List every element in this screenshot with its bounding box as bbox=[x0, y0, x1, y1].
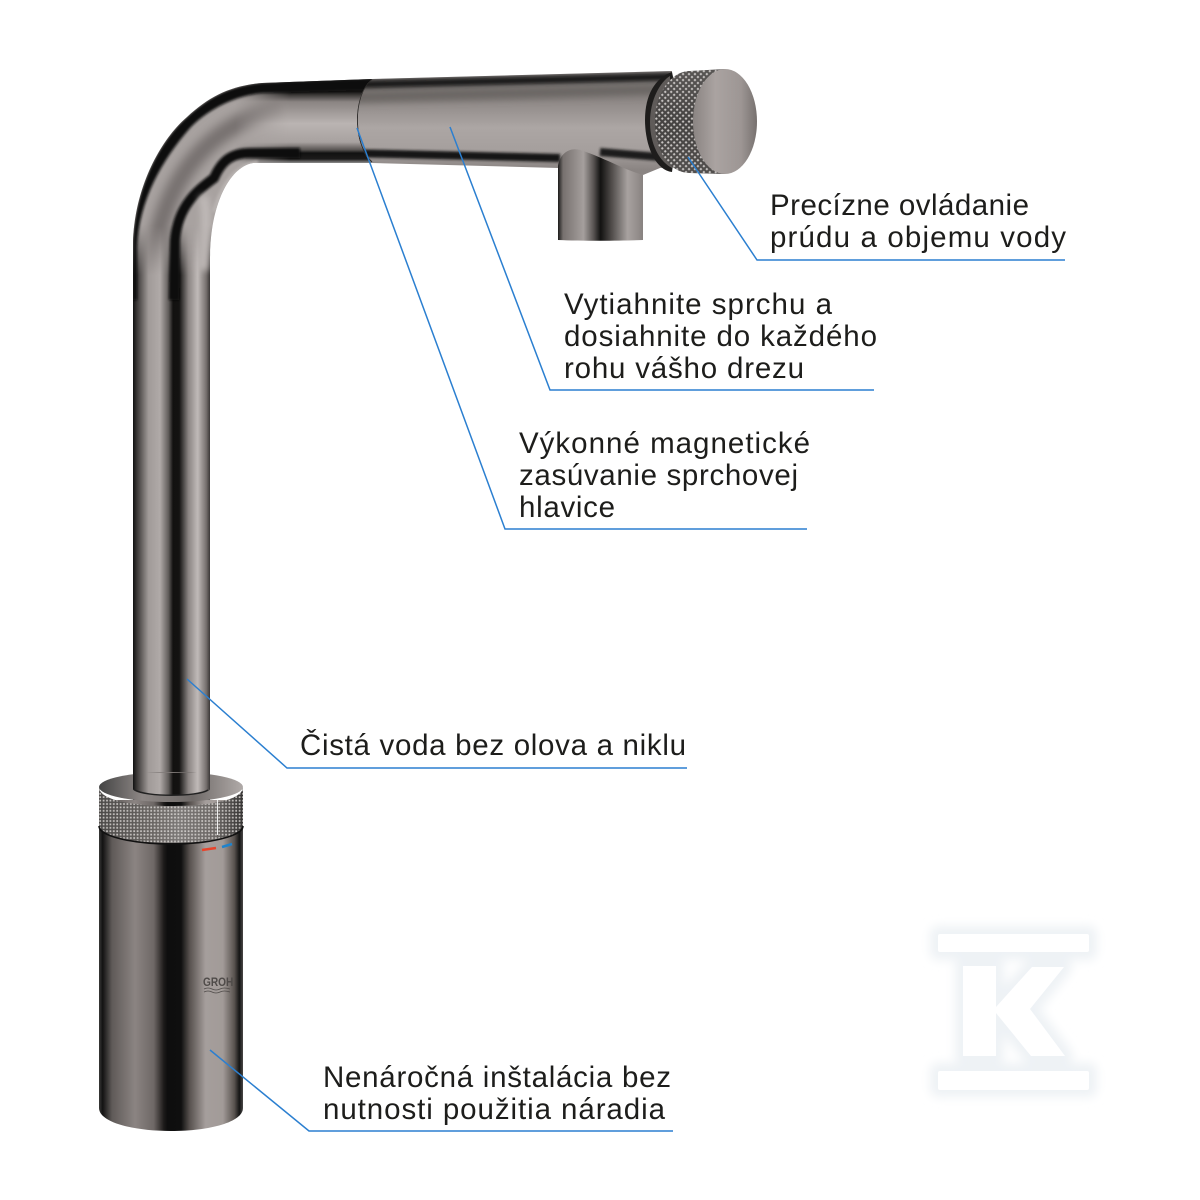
label text: Výkonné magnetické bbox=[519, 427, 810, 460]
leader line bbox=[187, 679, 687, 768]
faucet illustration bbox=[99, 69, 1066, 1140]
infographic canvas bbox=[98, 69, 1097, 1132]
label text: hlavice bbox=[519, 491, 615, 524]
callout: control precision bbox=[688, 157, 1066, 260]
cold indicator bbox=[222, 844, 232, 847]
pull-out spray head bbox=[350, 70, 680, 180]
label text: zasúvanie sprchovej bbox=[519, 459, 798, 492]
brand mark: GROHE bbox=[203, 977, 240, 989]
leader line bbox=[688, 157, 1065, 260]
label text: dosiahnite do každého bbox=[564, 320, 877, 353]
leader line bbox=[450, 127, 874, 390]
control knob bbox=[645, 69, 757, 174]
knurled ring bbox=[99, 787, 243, 844]
leader line bbox=[210, 1050, 673, 1131]
callout: magnetic docking bbox=[357, 128, 810, 529]
label text: rohu vášho drezu bbox=[564, 352, 804, 385]
label text: Čistá voda bez olova a niklu bbox=[300, 728, 686, 762]
callout: clean water bbox=[187, 679, 687, 768]
watermark logo bbox=[938, 934, 1089, 1090]
label text: prúdu a objemu vody bbox=[770, 221, 1066, 254]
curved riser tube bbox=[133, 79, 372, 760]
label text: Nenáročná inštalácia bez bbox=[323, 1061, 671, 1094]
label text: Precízne ovládanie bbox=[770, 189, 1029, 222]
leader line bbox=[357, 128, 807, 529]
hot indicator bbox=[202, 848, 216, 850]
base cylinder bbox=[99, 760, 243, 1140]
spout outlet stem bbox=[558, 149, 643, 241]
callout: easy installation bbox=[210, 1050, 673, 1131]
top disc bbox=[99, 772, 243, 802]
label text: nutnosti použitia náradia bbox=[323, 1093, 666, 1126]
label text: Vytiahnite sprchu a bbox=[564, 288, 833, 321]
callout: pull-out spray bbox=[450, 127, 877, 390]
brand mark bbox=[203, 978, 232, 994]
